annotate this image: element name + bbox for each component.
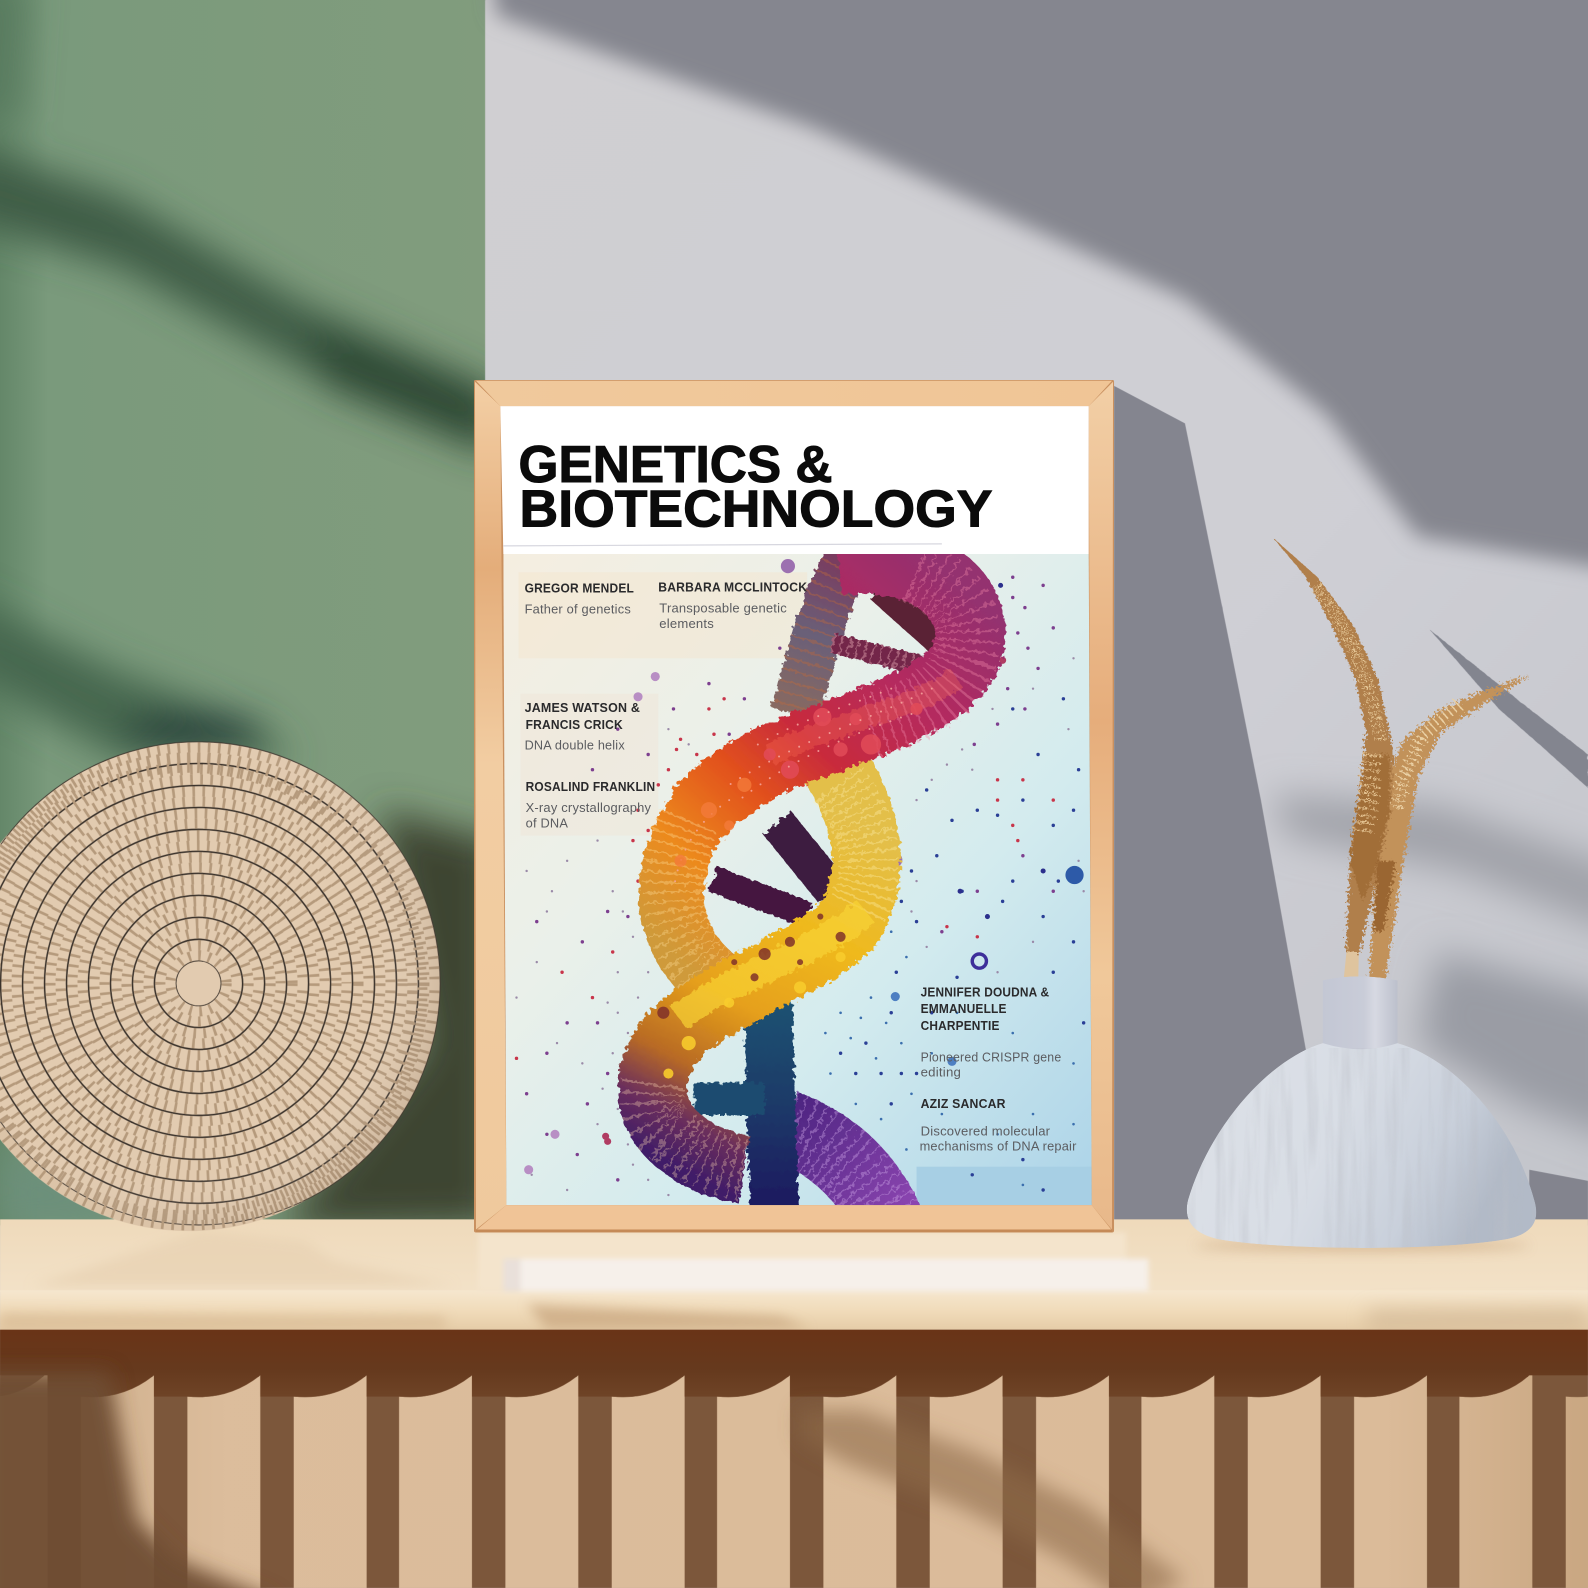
scientists: Jennifer Doudna and Emmanuelle Charpentier	[921, 985, 1061, 1080]
scientist: Aziz Sancar: Discovered molecular	[921, 1123, 1051, 1138]
DNA helix artwork	[501, 554, 1094, 1230]
marble vase	[1180, 976, 1544, 1256]
scientist: Rosalind Franklin	[526, 779, 655, 830]
scientist: Barbara McClintock: elements	[659, 616, 714, 631]
scientist: Rosalind Franklin: ROSALIND FRANKLIN	[526, 779, 655, 794]
scientist: Barbara McClintock: BARBARA MCCLINTOCK	[658, 579, 808, 594]
picture frame	[474, 380, 1114, 1233]
scientist: Aziz Sancar: mechanisms of DNA repair	[920, 1138, 1077, 1153]
frame reflection on shelf	[478, 1233, 1148, 1291]
purple lower strand	[785, 1126, 891, 1230]
scientists: Jennifer Doudna and Emmanuelle Charpentier: EMMANUELLE	[921, 1001, 1007, 1016]
scientist: Aziz Sancar	[920, 1096, 1077, 1153]
poster	[500, 406, 1094, 1230]
title: BIOTECHNOLOGY	[520, 480, 992, 538]
scientists: Jennifer Doudna and Emmanuelle Charpentier: JENNIFER DOUDNA &	[921, 985, 1049, 1000]
scientist: Gregor Mendel: Father of genetics	[525, 602, 631, 617]
scientists: James Watson and Francis Crick: FRANCIS CRICK	[526, 717, 623, 732]
scientist: Gregor Mendel: GREGOR MENDEL	[525, 580, 634, 595]
background: green wall with leaf shadows	[0, 0, 496, 1230]
strand A tail	[638, 794, 734, 989]
back strand top and rungs	[713, 559, 947, 915]
scientist: Barbara McClintock	[658, 579, 808, 631]
yellow strand	[652, 760, 869, 1170]
scientist: Rosalind Franklin: of DNA	[526, 815, 568, 830]
scientists: Jennifer Doudna and Emmanuelle Charpentier: Pioneered CRISPR gene	[921, 1049, 1061, 1064]
particle ring	[972, 954, 986, 968]
radiator slats under shelf	[0, 1330, 1588, 1588]
title: GENETICS &	[519, 435, 832, 493]
scientists: James Watson and Francis Crick	[525, 700, 640, 752]
scientists: Jennifer Doudna and Emmanuelle Charpentier: CHARPENTIE	[921, 1018, 1000, 1033]
shelf	[0, 1219, 1588, 1330]
central column	[694, 998, 775, 1215]
scientists: Jennifer Doudna and Emmanuelle Charpentier: editing	[921, 1065, 961, 1080]
dried pampas grass	[1273, 538, 1529, 987]
scientists: James Watson and Francis Crick: JAMES WATSON &	[525, 700, 640, 715]
rope coaster	[0, 741, 441, 1225]
bubbles on strands	[657, 689, 932, 1079]
particles	[517, 566, 1084, 1195]
text backing panels	[519, 572, 807, 836]
scientists: James Watson and Francis Crick: DNA double helix	[525, 737, 625, 752]
title	[519, 435, 992, 538]
scientist: Gregor Mendel	[525, 580, 634, 617]
strand A front	[697, 558, 970, 815]
scientist: Barbara McClintock: Transposable genetic	[659, 601, 787, 616]
scientist: Aziz Sancar: AZIZ SANCAR	[921, 1096, 1006, 1111]
scientist: Rosalind Franklin: X-ray crystallography	[526, 800, 652, 815]
background: grey wall with sunlight and shadows	[485, 0, 1588, 1225]
